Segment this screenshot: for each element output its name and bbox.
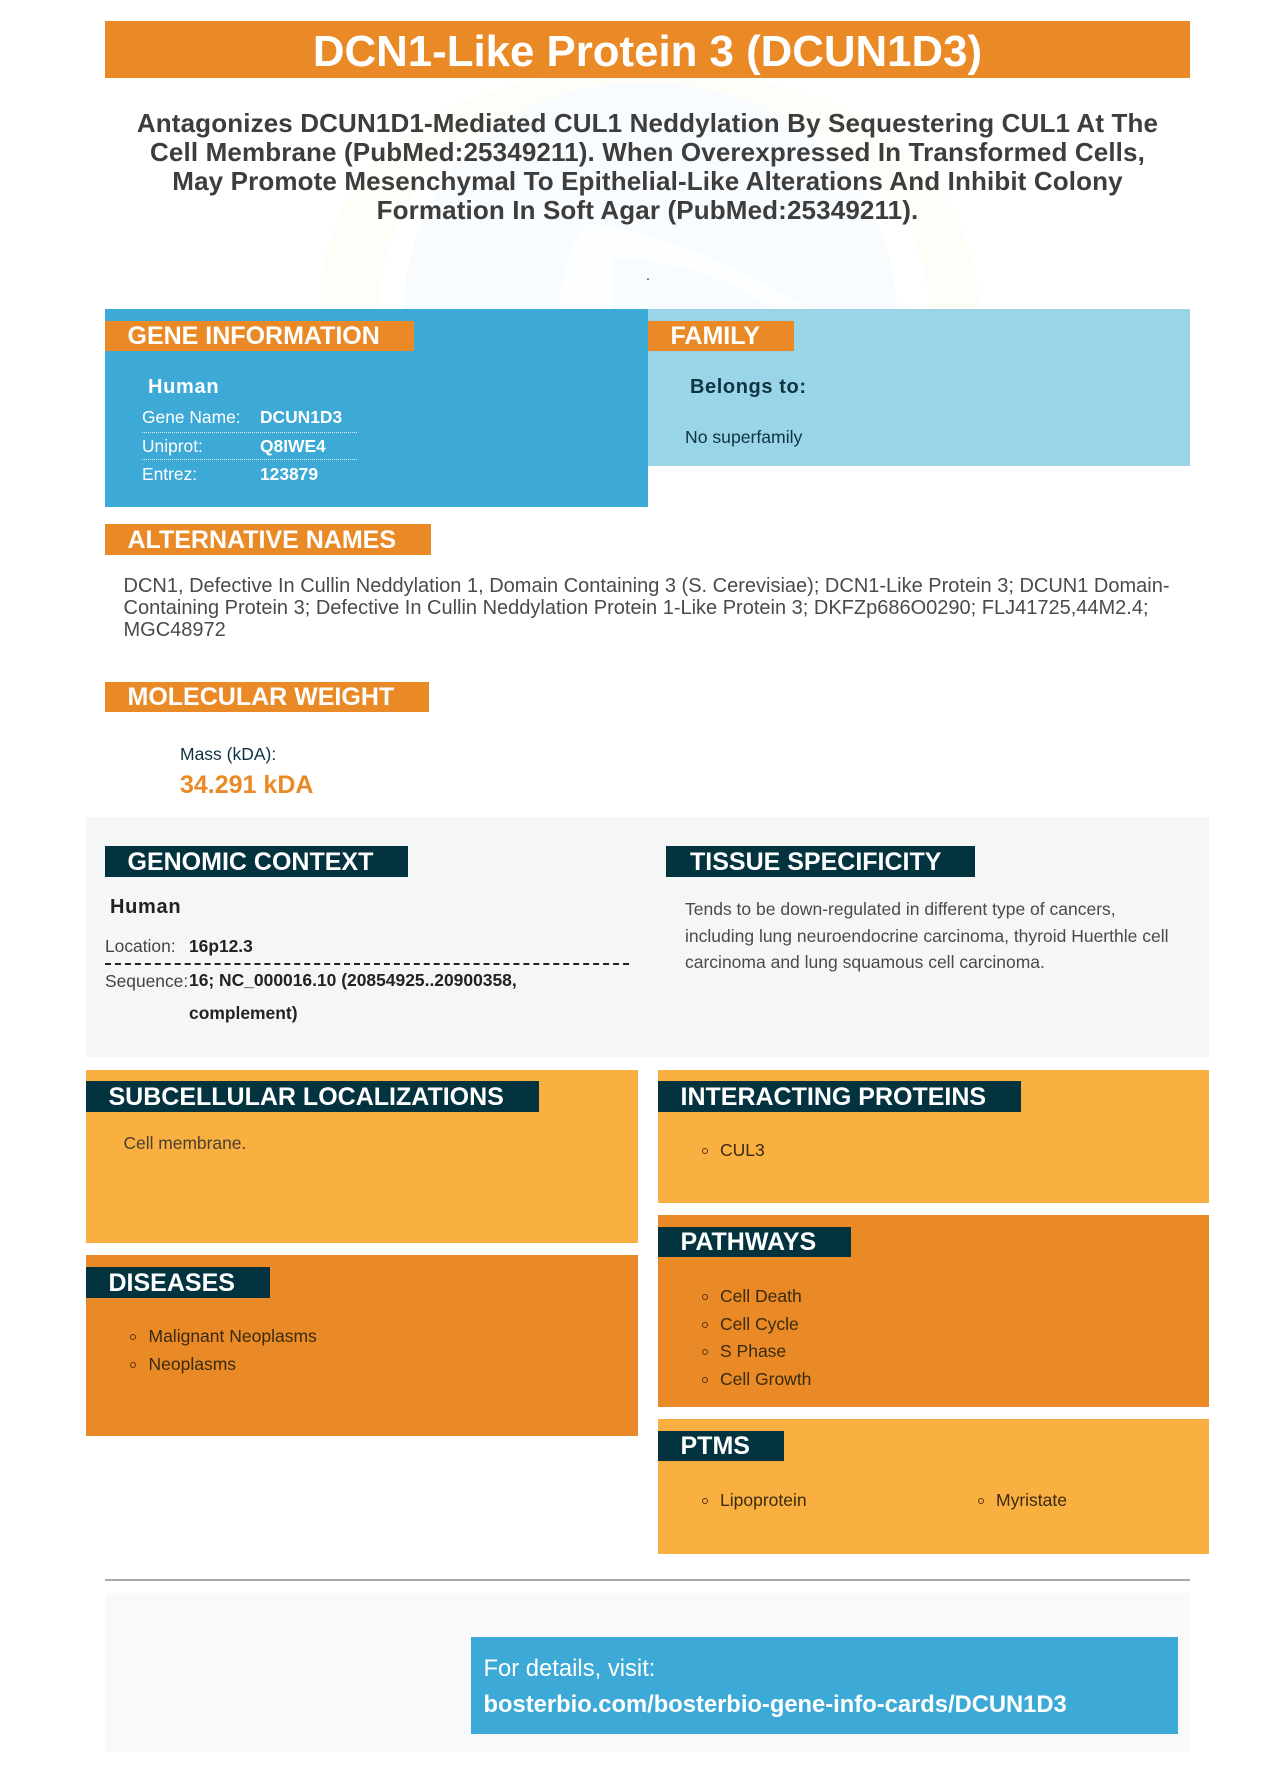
- sequence row: Sequence:: [105, 971, 188, 991]
- panel: interacting proteins: [658, 1070, 1209, 1203]
- uniprot row: Uniprot:: [142, 436, 203, 456]
- entrez row: [142, 464, 318, 484]
- disease item: Malignant Neoplasms: [148, 1326, 317, 1346]
- heading: alternative names: ALTERNATIVE NAMES: [128, 526, 396, 554]
- heading: pathways: [658, 1227, 851, 1257]
- subtitle description: May Promote Mesenchymal To Epithelial-Like Alterations And Inhibit Colony: [172, 166, 1123, 196]
- heading: family: FAMILY: [670, 322, 760, 350]
- entrez row: 123879: [260, 464, 318, 484]
- panel: ptms: [658, 1419, 1209, 1554]
- location row: Location:: [105, 936, 176, 956]
- protein item: CUL3: [720, 1140, 765, 1160]
- heading: ptms: [658, 1431, 784, 1461]
- gene name row: DCUN1D3: [260, 407, 342, 427]
- pathway item: Cell Growth: [720, 1369, 811, 1389]
- heading: interacting proteins: INTERACTING PROTEINS: [680, 1082, 986, 1110]
- panel: pathways: [658, 1215, 1209, 1407]
- gene name row: [142, 406, 357, 433]
- panel: subcellular localizations: [86, 1070, 638, 1243]
- footer panel: [105, 1593, 1190, 1752]
- no superfamily: No superfamily: [685, 427, 802, 447]
- heading: ptms: PTMS: [680, 1432, 750, 1460]
- location value: 16p12.3: [189, 936, 253, 956]
- disease item: Neoplasms: [148, 1354, 236, 1374]
- panel: genomic context and tissue specificity: [86, 817, 1209, 1057]
- alternative names text: DCN1, Defective In Cullin Neddylation 1, Domain Containing 3 (S. Cerevisiae); DCN1-Like Protein 3; DCUN1 Domain-: [124, 575, 1169, 597]
- heading: molecular weight: MOLECULAR WEIGHT: [128, 683, 394, 711]
- mass label: Mass (kDA):: [180, 744, 276, 764]
- alternative names text: [124, 575, 1169, 641]
- sequence value: complement): [189, 1003, 298, 1023]
- link text: bosterbio.com/bosterbio-gene-info-cards/DCUN1D3: [484, 1691, 1067, 1718]
- heading: diseases: DISEASES: [108, 1268, 235, 1296]
- heading: family: [648, 321, 794, 351]
- ptm item: Lipoprotein: [720, 1490, 807, 1510]
- small dot: .: [646, 267, 650, 283]
- subtitle description: Cell Membrane (PubMed:25349211). When Overexpressed In Transformed Cells,: [150, 137, 1145, 167]
- gene name row: Gene Name:: [142, 407, 241, 427]
- ptm item: Myristate: [996, 1490, 1067, 1510]
- species: Human: [110, 896, 181, 918]
- tissue specificity text: carcinoma and lung squamous cell carcinoma.: [685, 952, 1045, 972]
- dashed separator: [105, 963, 629, 965]
- belongs to: Belongs to:: [690, 376, 807, 398]
- heading: genomic context: GENOMIC CONTEXT: [128, 848, 373, 876]
- uniprot row: [142, 433, 357, 460]
- callout: details link: [471, 1637, 1178, 1734]
- title banner: [105, 21, 1190, 78]
- sequence value: [189, 970, 517, 1023]
- tissue specificity text: [685, 899, 1168, 972]
- heading: subcellular localizations: SUBCELLULAR LOCALIZATIONS: [108, 1082, 504, 1110]
- uniprot row: Q8IWE4: [260, 436, 326, 456]
- tissue specificity text: including lung neuroendocrine carcinoma, thyroid Huerthle cell: [685, 926, 1168, 946]
- visit label: For details, visit:: [484, 1655, 655, 1682]
- heading: pathways: PATHWAYS: [680, 1228, 816, 1256]
- mass value: 34.291 kDA: [180, 771, 313, 799]
- pathway item: S Phase: [720, 1341, 786, 1361]
- panel: family: [648, 309, 1190, 466]
- heading: tissue specificity: TISSUE SPECIFICITY: [690, 848, 941, 876]
- sequence value: 16; NC_000016.10 (20854925..20900358,: [189, 970, 517, 990]
- title banner: DCN1-Like Protein 3 (DCUN1D3): [313, 27, 982, 76]
- panel: gene information: [105, 309, 648, 507]
- alternative names text: Containing Protein 3; Defective In Cullin Neddylation Protein 1-Like Protein 3; DKFZp686O0290; FLJ41725,44M2.4;: [124, 597, 1149, 619]
- tissue specificity text: Tends to be down-regulated in different type of cancers,: [685, 899, 1116, 919]
- localization text: Cell membrane.: [124, 1133, 246, 1153]
- entrez row: Entrez:: [142, 464, 197, 484]
- subtitle description: Formation In Soft Agar (PubMed:25349211).: [377, 195, 918, 225]
- species: Human: [148, 376, 219, 398]
- panel: diseases: [86, 1255, 638, 1436]
- pathway item: Cell Death: [720, 1286, 802, 1306]
- watermark logo: [300, 75, 1000, 310]
- subtitle description: Antagonizes DCUN1D1-Mediated CUL1 Neddylation By Sequestering CUL1 At The: [137, 108, 1158, 138]
- alternative names text: MGC48972: [124, 619, 226, 641]
- subtitle description: [137, 108, 1158, 225]
- heading: diseases: [86, 1267, 270, 1298]
- pathway item: Cell Cycle: [720, 1314, 799, 1334]
- heading: gene information: GENE INFORMATION: [128, 322, 380, 350]
